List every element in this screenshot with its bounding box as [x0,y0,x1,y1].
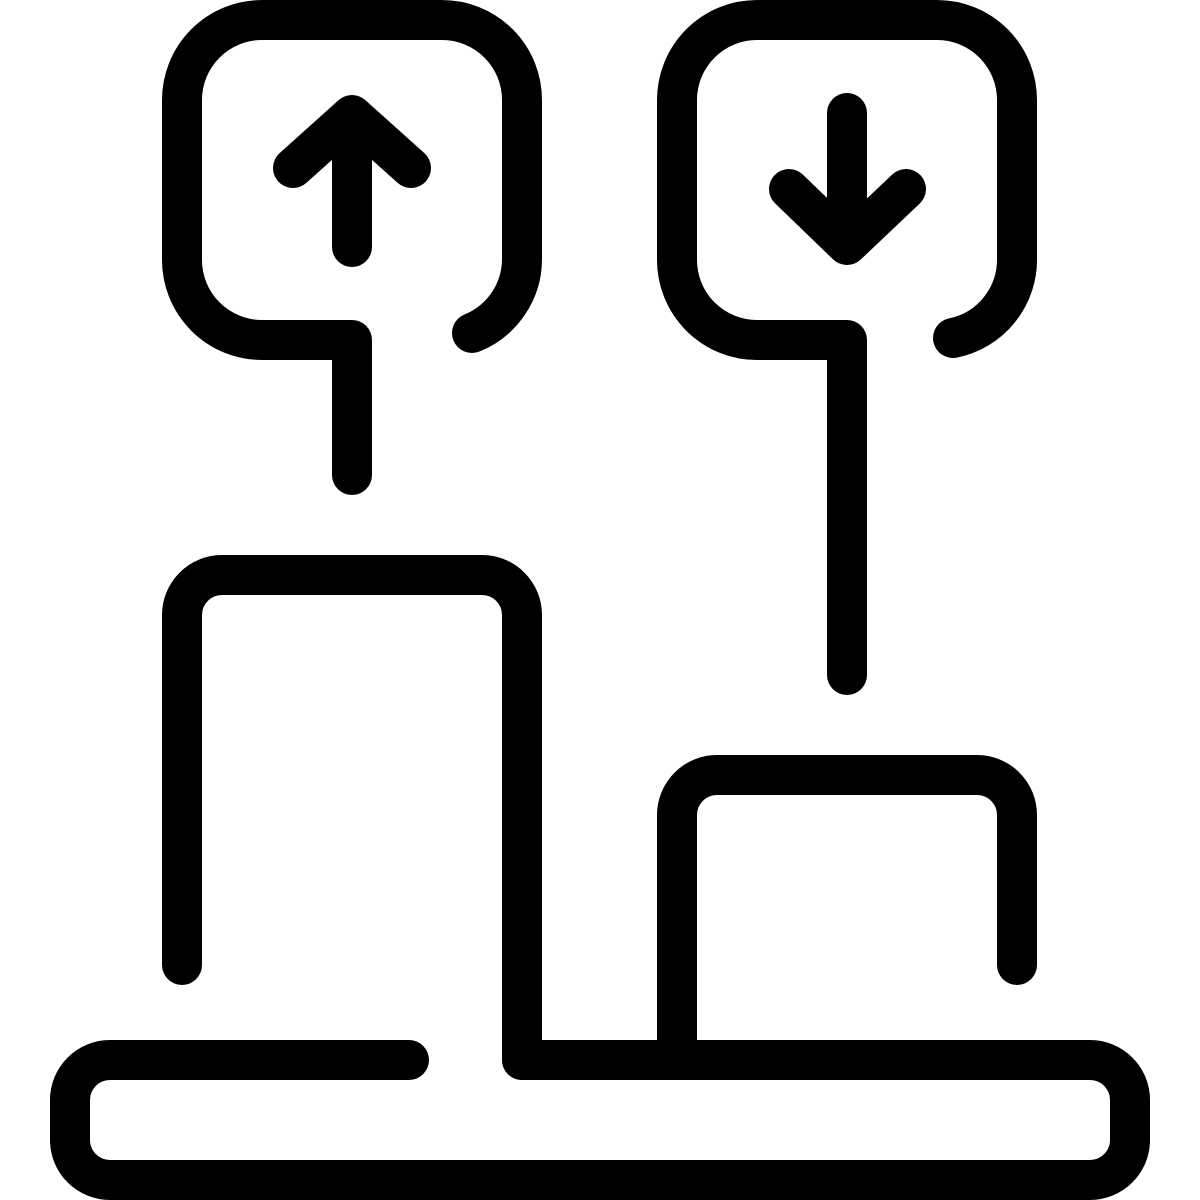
base platform [70,1060,1130,1180]
icon: up arrow [293,115,411,247]
left bubble with up arrow [182,20,522,475]
icon: down arrow [789,113,906,245]
short bar [677,775,1017,1060]
right bubble with down arrow [677,20,1017,675]
tall bar [182,575,522,1060]
